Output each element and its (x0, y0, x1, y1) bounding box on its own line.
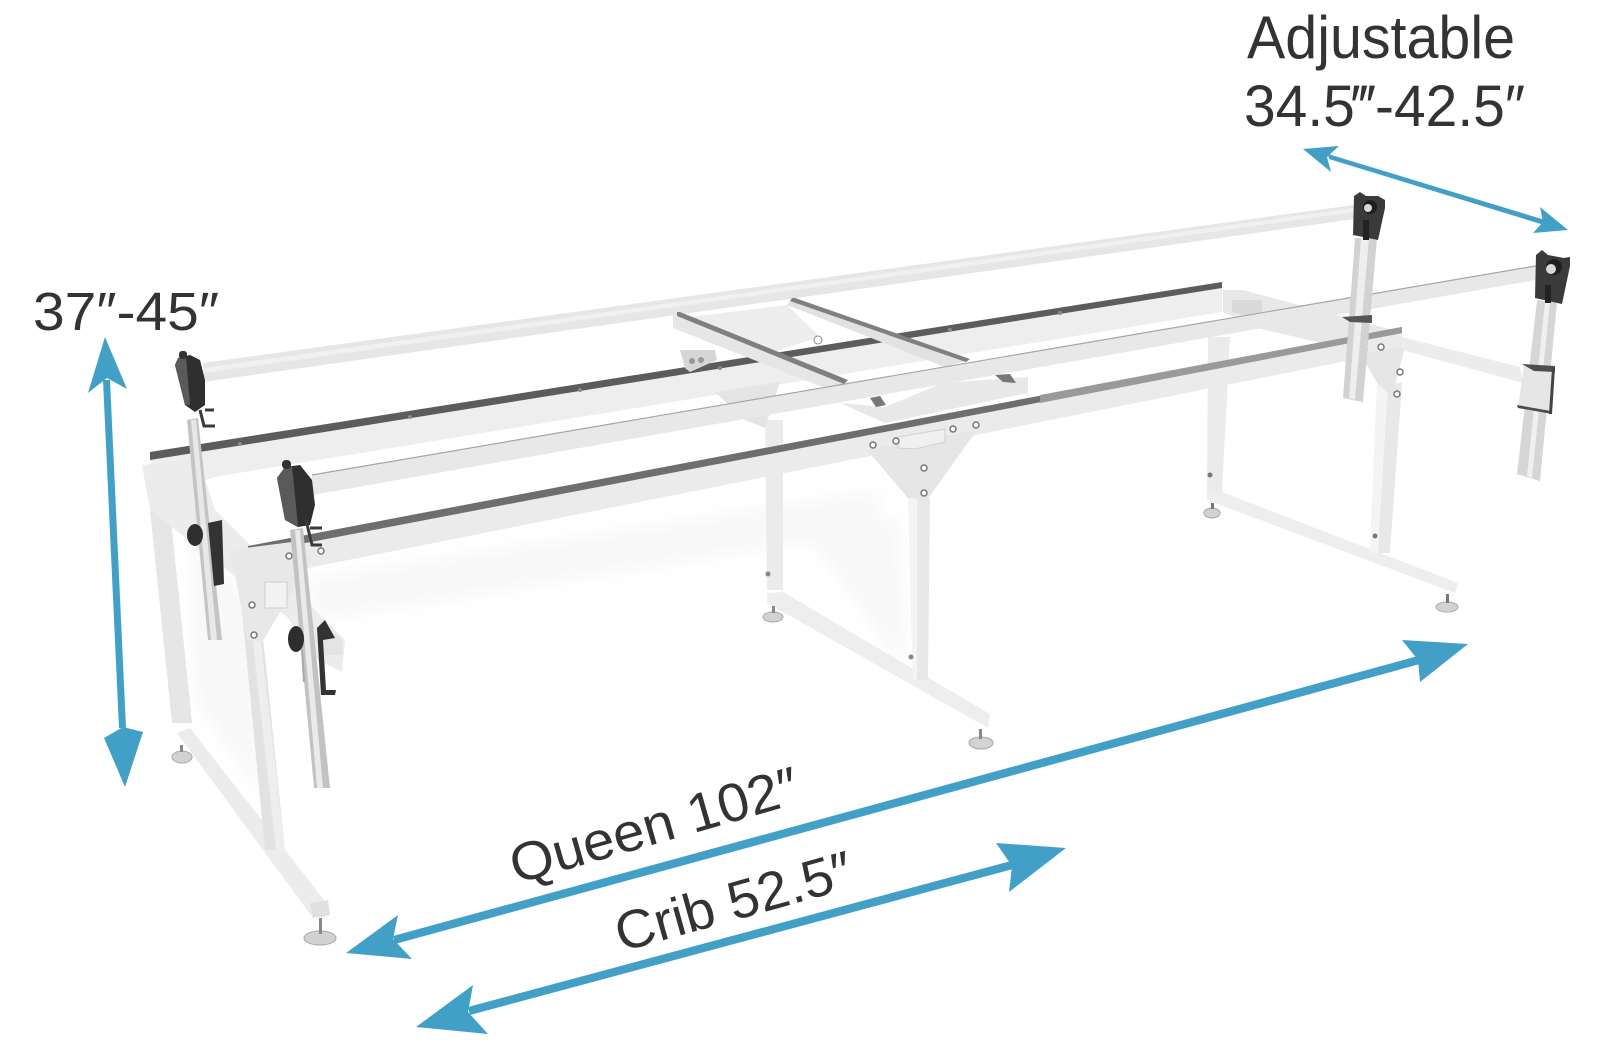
legs: right (1207, 337, 1458, 603)
left cross beam (142, 458, 345, 672)
arrow: queen length (346, 640, 1468, 959)
label: adjustable: Adjustable (1247, 4, 1515, 71)
right cross beam (1223, 290, 1400, 345)
front rail (248, 327, 1402, 554)
back table beam (150, 288, 1222, 490)
back rail (150, 282, 1222, 460)
legs: back left and front left (150, 510, 330, 934)
gusset at back middle (715, 382, 780, 428)
arrow: crib length (416, 843, 1066, 1034)
gussets (230, 344, 1405, 642)
legs: middle (765, 420, 990, 739)
left front upright (277, 460, 342, 788)
arrow: height (88, 337, 143, 787)
left back upright (175, 351, 224, 640)
right extension arm (1402, 337, 1523, 383)
back roller tube (203, 203, 1368, 382)
carriage (673, 298, 1028, 423)
arrow: adjustable width (1303, 146, 1568, 233)
label: adjustable: 34.5‴-42.5″ (1244, 74, 1525, 139)
front table beam (248, 333, 1402, 580)
right back upright (1342, 192, 1385, 402)
soft floor shadow (190, 490, 905, 800)
right front upright (1517, 250, 1570, 481)
label: height: 37″-45″ (33, 282, 219, 342)
label: queen: Queen 102″ (503, 756, 806, 896)
quilting frame (142, 192, 1570, 945)
front roller tube (312, 263, 1553, 495)
feet (172, 508, 1458, 945)
label: adjustable (1244, 4, 1525, 139)
label: crib: Crib 52.5″ (608, 840, 859, 964)
